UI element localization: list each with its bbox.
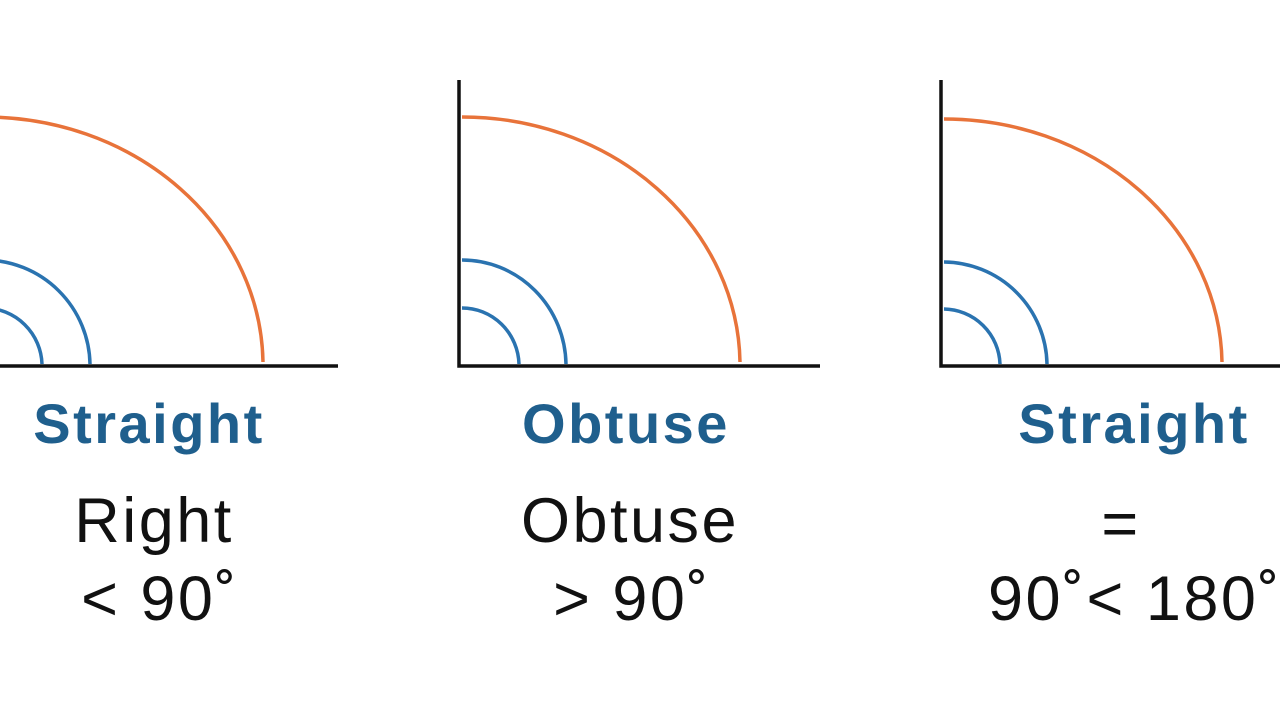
panel: left straight <box>0 80 338 634</box>
text: Right < 90: Right <box>74 486 234 556</box>
text: Right < 90: < 90˚ <box>81 564 239 634</box>
text: Obtuse > 90: > 90˚ <box>553 564 711 634</box>
text: = 90 < 180: = <box>1101 489 1141 559</box>
panel: middle obtuse <box>459 80 820 634</box>
diagram: left angle <box>0 80 338 366</box>
panel: right straight <box>941 80 1280 634</box>
diagram: middle angle <box>459 80 820 366</box>
label: Straight: Straight <box>33 392 265 455</box>
text: = 90 < 180: 90˚< 180˚ <box>988 564 1280 634</box>
diagram: right angle <box>941 80 1280 366</box>
label: Obtuse: Obtuse <box>522 392 730 455</box>
text: Obtuse > 90: Obtuse <box>521 486 739 556</box>
label: Straight: Straight <box>1018 392 1250 455</box>
